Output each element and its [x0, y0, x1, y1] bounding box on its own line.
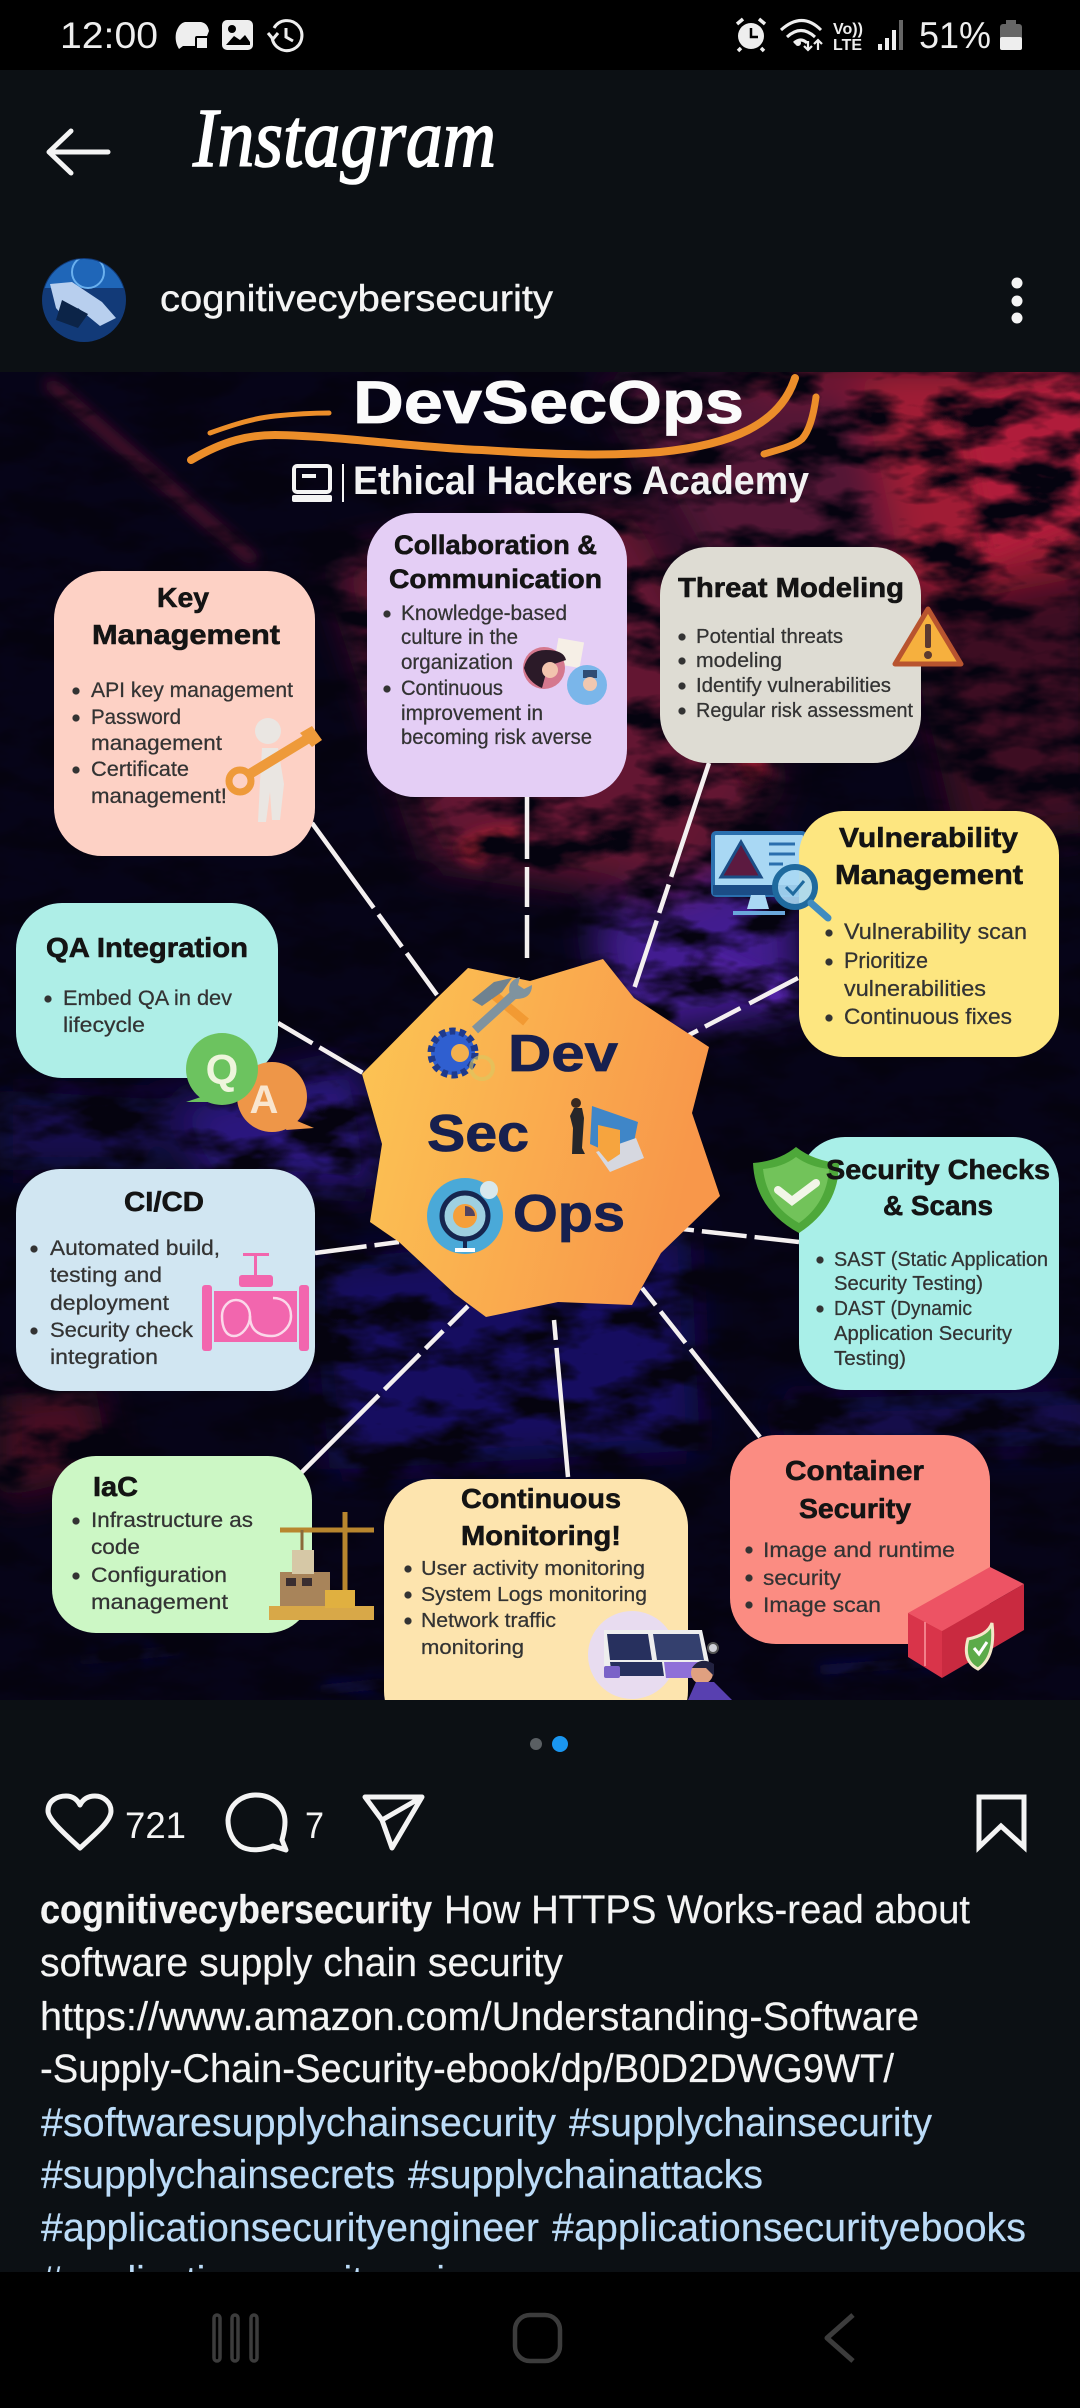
bullet list: Configuration — [91, 1564, 227, 1587]
bullet list — [816, 1249, 1048, 1370]
bullet list: security — [763, 1567, 842, 1590]
bullet list — [404, 1558, 647, 1659]
bullet list: User activity monitoring — [421, 1558, 645, 1580]
bullet list — [72, 1509, 253, 1614]
bullet list: Identify vulnerabilities — [696, 675, 891, 697]
icon: green shield — [753, 1147, 839, 1233]
panel: QA Integration — [16, 903, 314, 1132]
VoLTE: Vo)) — [833, 21, 863, 38]
heading — [390, 534, 601, 588]
caption: https://www.amazon.com/Understanding-Software — [40, 1995, 919, 2039]
center hub — [362, 959, 720, 1317]
caption: software supply chain security — [40, 1941, 563, 1985]
bullet list: Knowledge-based — [401, 602, 567, 625]
bullet list: Certificate — [91, 758, 189, 781]
bullet list: Image and runtime — [763, 1539, 955, 1562]
panel: Threat Modeling — [660, 547, 961, 763]
background texture — [0, 360, 1080, 1700]
title swoosh — [191, 378, 816, 460]
heading: Container — [785, 1455, 924, 1486]
panel: Key Management — [54, 571, 322, 856]
connector lines — [278, 763, 799, 1477]
icon: blue gear — [431, 1031, 493, 1079]
icon: comment — [228, 1795, 286, 1850]
bullet list: Embed QA in dev — [63, 987, 233, 1010]
panel: post image — [0, 360, 1080, 1739]
bullet list: Potential threats — [696, 626, 843, 648]
heading — [826, 1154, 1050, 1221]
bullet list — [30, 1237, 220, 1369]
bullet list — [746, 1539, 955, 1617]
icon: dashboard operator — [588, 1611, 732, 1700]
heading: Monitoring! — [461, 1520, 621, 1551]
bullet list: System Logs monitoring — [421, 1584, 647, 1606]
icon: Q speech bubble: Q — [206, 1046, 238, 1093]
icon: pink pipeline valve — [202, 1253, 309, 1351]
bullet list: API key management — [91, 679, 293, 702]
icon: construction crane — [269, 1512, 374, 1620]
panel: Continuous Monitoring — [384, 1479, 732, 1739]
bullet list: code — [91, 1536, 140, 1559]
caption: #applicationsecurityebooks — [552, 2206, 1026, 2250]
icon: alarm — [737, 19, 765, 51]
caption: cognitivecybersecurity — [40, 1888, 433, 1932]
VoLTE: LTE — [833, 37, 862, 54]
heading: Management — [835, 859, 1023, 890]
icon: bookmark — [979, 1797, 1024, 1847]
status bar — [0, 0, 1080, 70]
heading: & Scans — [883, 1190, 993, 1221]
comment count: 7 — [305, 1805, 324, 1846]
bullet list: lifecycle — [63, 1014, 145, 1037]
bullet list: DAST (Dynamic — [834, 1298, 972, 1320]
carousel dots — [530, 1736, 568, 1752]
heading — [785, 1455, 924, 1524]
icon: history clock — [268, 21, 302, 51]
bullet list: integration — [50, 1346, 158, 1369]
bullet list: culture in the — [401, 626, 518, 649]
icon: wifi — [781, 20, 822, 50]
magnifier — [775, 867, 828, 918]
bullet list — [826, 919, 1027, 1029]
bullet list: modeling — [696, 650, 782, 672]
bullet list: Security Testing) — [834, 1273, 983, 1295]
bullet list — [44, 987, 233, 1037]
icon: A speech bubble — [237, 1062, 314, 1132]
caption: #applicationsecurityseries — [41, 2259, 486, 2303]
navigation bar — [0, 2272, 1080, 2408]
icon: target gear — [427, 1178, 503, 1254]
action bar — [48, 1795, 1024, 1850]
panel: Security Checks & Scans — [753, 1137, 1059, 1390]
heading: Key — [157, 582, 209, 613]
avatar — [42, 256, 126, 342]
icon: signal bars — [878, 20, 903, 50]
icon: figure holding key — [229, 718, 322, 822]
icon: person with laptop — [570, 1098, 644, 1172]
icon: monitor with magnifier — [713, 833, 805, 913]
bullet list: Security check — [50, 1319, 194, 1342]
bullet list: Network traffic — [421, 1610, 556, 1632]
title: DevSecOps: DevSecOps — [353, 369, 744, 436]
username: cognitivecybersecurity — [160, 278, 554, 319]
caption: #supplychainattacks — [408, 2153, 763, 2197]
icon: share plane — [365, 1797, 422, 1848]
bullet list: testing and — [50, 1264, 162, 1287]
panel: CI/CD — [16, 1169, 315, 1391]
VoLTE — [833, 21, 863, 54]
bullet list: management — [91, 732, 222, 755]
panel: Collaboration & Communication — [367, 513, 627, 797]
bullet list: Vulnerability scan — [844, 919, 1027, 944]
bullet list: Prioritize — [844, 948, 928, 973]
caption: How HTTPS Works-read about — [444, 1888, 970, 1932]
heading — [461, 1483, 621, 1551]
heading: IaC — [93, 1471, 138, 1502]
heading — [835, 822, 1023, 890]
bullet list: management — [91, 1591, 228, 1614]
caption — [40, 1888, 1026, 2303]
bullet list: Testing) — [834, 1348, 906, 1370]
clock: 12:00 — [60, 15, 158, 56]
hub octagon star — [362, 959, 720, 1317]
caption: -Supply-Chain-Security-ebook/dp/B0D2DWG9WT/ — [40, 2047, 895, 2091]
Sec label: Sec — [427, 1105, 529, 1163]
icon: Q speech bubble — [186, 1033, 258, 1105]
Ops label: Ops — [513, 1185, 625, 1243]
caption: #softwaresupplychainsecurity — [41, 2101, 556, 2145]
bullet list: Image scan — [763, 1594, 881, 1617]
heading: Security — [799, 1493, 911, 1524]
bullet list: management! — [91, 785, 227, 808]
panel: Vulnerability Management — [713, 811, 1059, 1057]
icon: back arrow — [49, 131, 108, 173]
icon: game controller notification — [176, 22, 209, 49]
like count: 721 — [125, 1805, 186, 1846]
heading: Security Checks — [826, 1154, 1050, 1185]
icon: red shipping container — [908, 1567, 1024, 1678]
icon: back — [827, 2315, 853, 2361]
bullet list: Continuous fixes — [844, 1004, 1012, 1029]
heading — [92, 582, 280, 650]
subtitle: Ethical Hackers Academy: Ethical Hackers Academy — [353, 459, 810, 503]
icon: more menu — [1012, 278, 1022, 324]
bullet list: Regular risk assessment — [696, 700, 913, 722]
icon: home — [515, 2315, 560, 2361]
bullet list: improvement in — [401, 702, 543, 725]
caption: #supplychainsecrets — [41, 2153, 395, 2197]
heading: Threat Modeling — [678, 572, 904, 603]
bullet list — [384, 602, 592, 749]
bullet list: vulnerabilities — [844, 976, 986, 1001]
heading: Communication — [389, 564, 602, 594]
brand logo: laptop icon — [292, 464, 344, 502]
heading: Continuous — [461, 1483, 621, 1514]
heading: Management — [92, 619, 280, 650]
icon: warning triangle — [895, 609, 961, 664]
bullet list: Infrastructure as — [91, 1509, 253, 1532]
heading: CI/CD — [124, 1186, 204, 1217]
bullet list: deployment — [50, 1292, 169, 1315]
bullet list — [678, 626, 913, 722]
icon: battery — [1000, 20, 1022, 50]
caption: #applicationsecurityengineer — [41, 2206, 539, 2250]
icon: people collaborating — [523, 638, 607, 705]
bullet list: organization — [401, 651, 513, 674]
heading: QA Integration — [46, 932, 248, 963]
bullet list — [72, 679, 293, 808]
bullet list: SAST (Static Application — [834, 1249, 1048, 1271]
panel: Container Security — [730, 1435, 1024, 1678]
bullet list: Continuous — [401, 677, 503, 700]
bullet list: Automated build, — [50, 1237, 220, 1260]
bullet list: Password — [91, 706, 181, 729]
icon: heart — [48, 1796, 111, 1848]
Dev label: Dev — [508, 1025, 618, 1083]
bullet list: Application Security — [834, 1323, 1012, 1345]
panel: IaC — [52, 1456, 374, 1633]
icon: hammer and wrench — [472, 977, 532, 1030]
bullet list: becoming risk averse — [401, 726, 592, 749]
battery percent: 51% — [919, 15, 991, 56]
heading: Collaboration & — [394, 530, 597, 560]
bullet list: monitoring — [421, 1637, 524, 1659]
Instagram wordmark: Instagram — [192, 92, 496, 185]
caption: #supplychainsecurity — [569, 2101, 932, 2145]
icon: A speech bubble: A — [250, 1078, 278, 1122]
icon: gallery — [222, 20, 253, 50]
icon: recents — [214, 2315, 257, 2361]
heading: Vulnerability — [839, 822, 1018, 853]
